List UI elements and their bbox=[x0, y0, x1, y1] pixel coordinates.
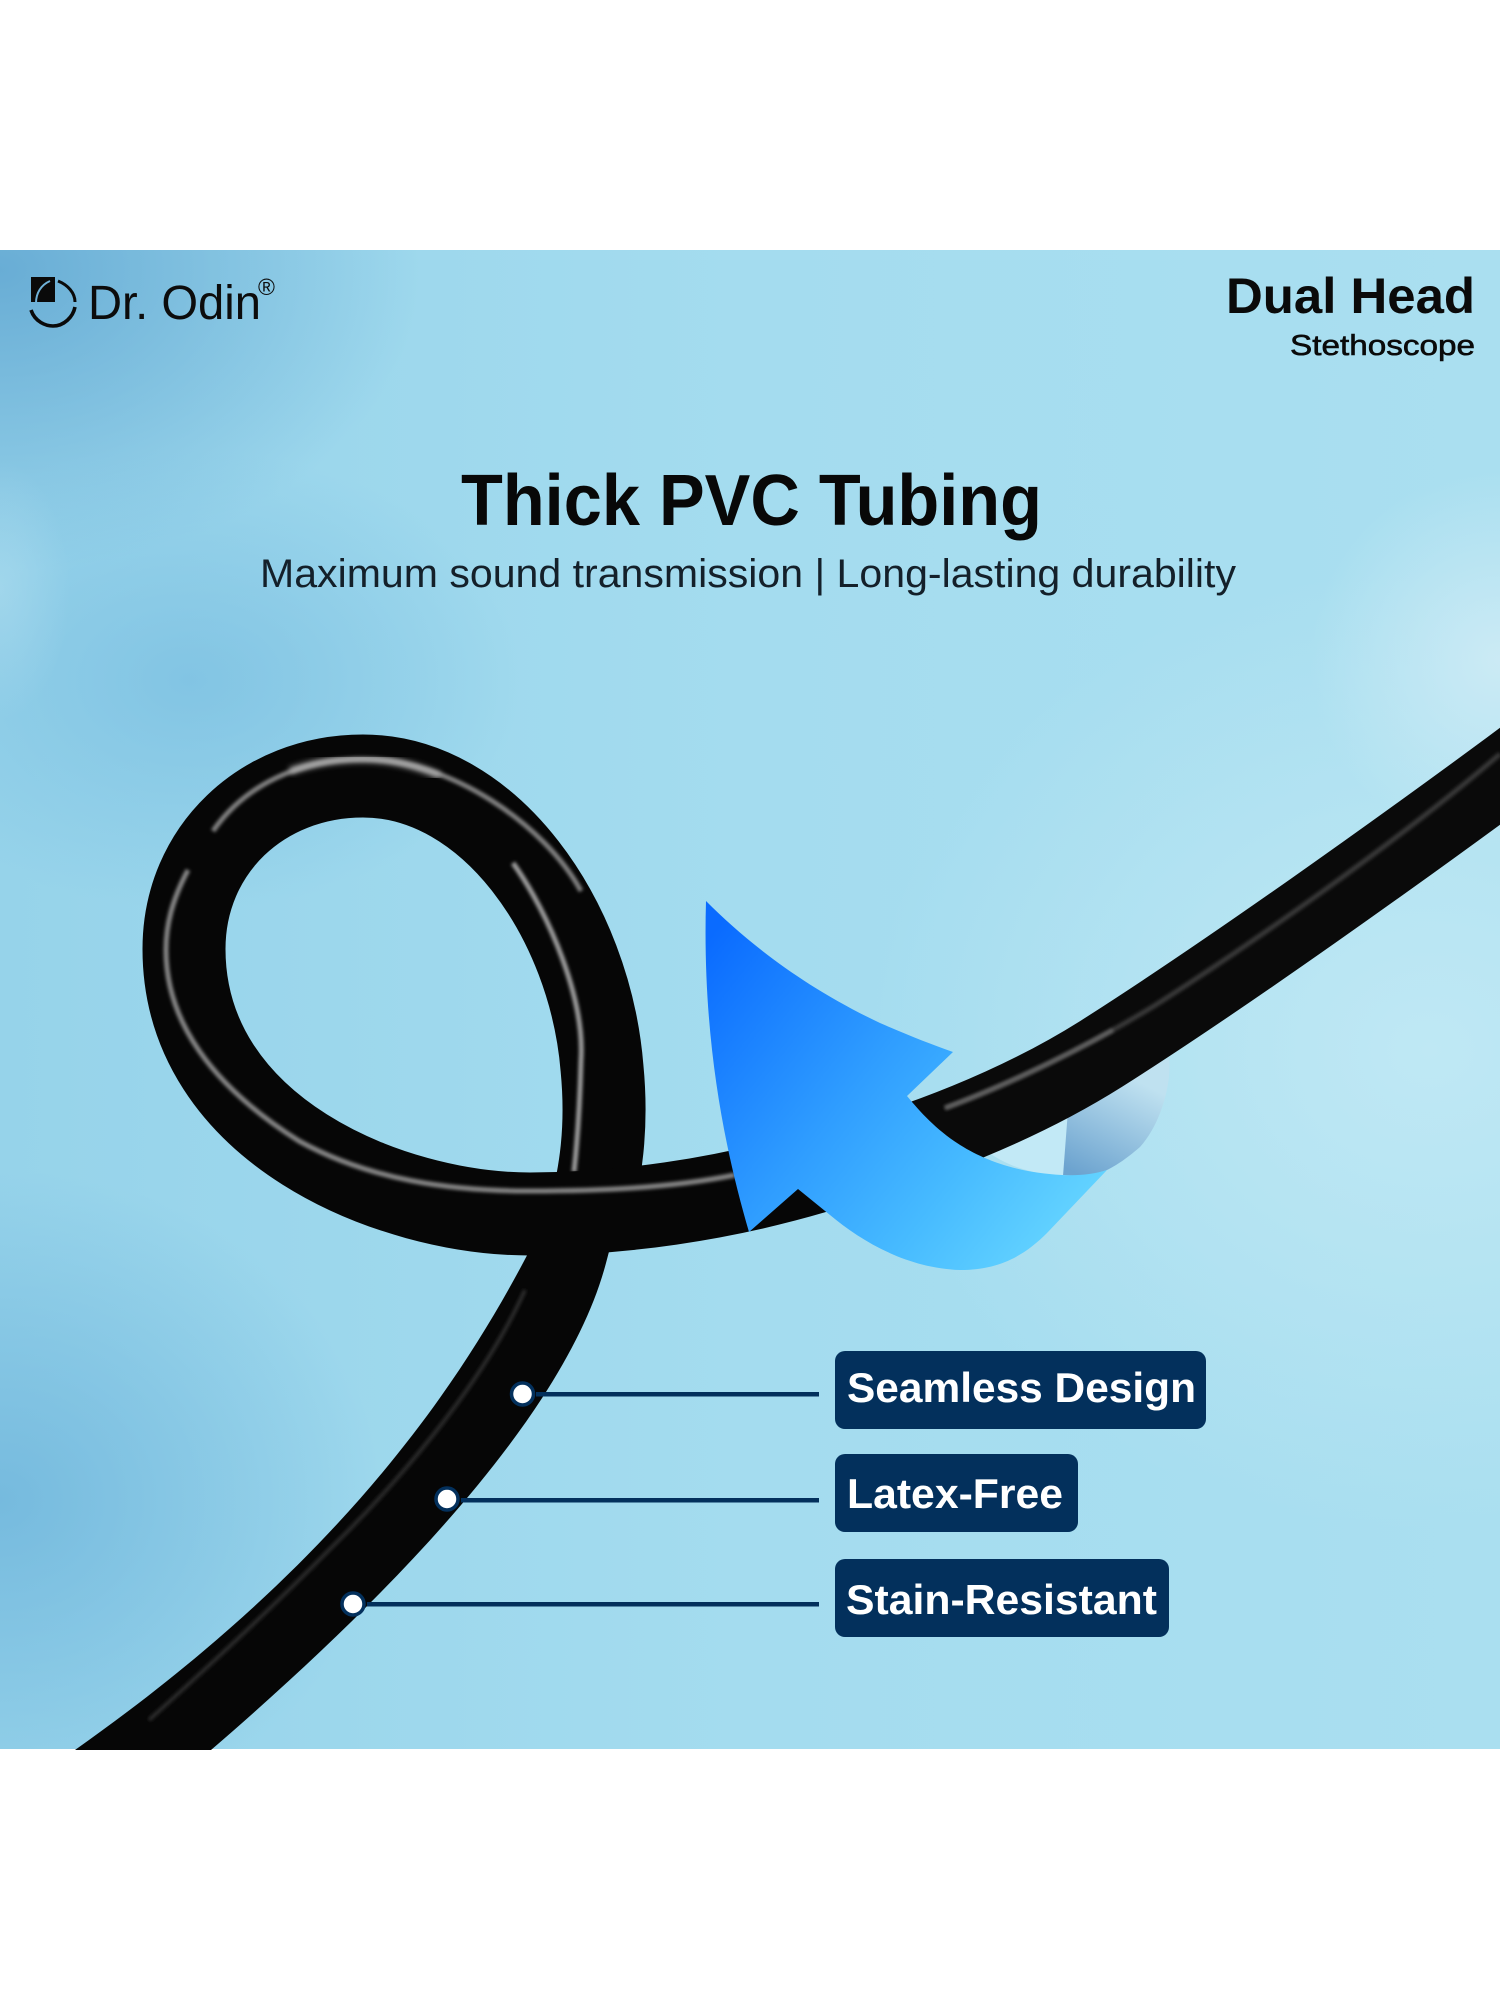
arrow inner sheen bbox=[985, 1110, 1068, 1176]
callout: Latex-Free bbox=[436, 1454, 1078, 1532]
product type: Stethoscope: Stethoscope bbox=[1290, 330, 1475, 362]
arrow: blue curved arrow pointing to tube bbox=[706, 901, 1107, 1270]
tube highlight: left and bottom of loop bbox=[166, 870, 735, 1191]
marker dot bbox=[436, 1488, 458, 1510]
label box bbox=[835, 1559, 1169, 1637]
tube highlight: near arrow bbox=[945, 1030, 1113, 1108]
marker dot bbox=[342, 1593, 364, 1615]
label text: Seamless Design bbox=[847, 1364, 1196, 1411]
logo: Dr. Odin bbox=[31, 274, 275, 330]
label box bbox=[835, 1454, 1078, 1532]
connector line bbox=[461, 1498, 819, 1502]
arrow tail behind tube bbox=[985, 1058, 1169, 1176]
marker dot bbox=[512, 1383, 534, 1405]
registered mark: ® bbox=[258, 274, 275, 300]
tube highlight: lower leg bbox=[149, 1290, 525, 1720]
panel: blue gradient background bbox=[0, 250, 1500, 1749]
label text: Stain-Resistant bbox=[846, 1576, 1157, 1623]
callout: Stain-Resistant bbox=[342, 1559, 1169, 1637]
tube: right run bbox=[815, 724, 1500, 1172]
tube highlight: bright crest bbox=[290, 759, 440, 776]
black PVC tube bbox=[75, 724, 1500, 1750]
tube: lower leg bbox=[75, 1225, 616, 1750]
callout: Seamless Design bbox=[512, 1351, 1206, 1429]
icon: logo mark bbox=[31, 277, 75, 326]
label box bbox=[835, 1351, 1206, 1429]
arrow underside curl bbox=[1060, 1058, 1169, 1175]
label text: Latex-Free bbox=[847, 1470, 1063, 1517]
tube sheen: right run bbox=[945, 754, 1500, 1108]
title: Thick PVC Tubing bbox=[461, 461, 1042, 541]
tube highlight: right of loop bbox=[513, 863, 581, 1172]
product line: Dual Head: Dual Head bbox=[1226, 268, 1475, 324]
connector line bbox=[367, 1602, 819, 1606]
subtitle: Maximum sound transmission | Long-lasting durability bbox=[260, 552, 1236, 596]
tube highlight: top of loop bbox=[213, 759, 581, 891]
brand name: Dr. Odin bbox=[88, 277, 261, 330]
tube: front of loop bbox=[184, 776, 815, 1214]
product name bbox=[1226, 268, 1475, 362]
connector line bbox=[536, 1392, 819, 1396]
tube: back of loop bbox=[363, 776, 604, 1215]
